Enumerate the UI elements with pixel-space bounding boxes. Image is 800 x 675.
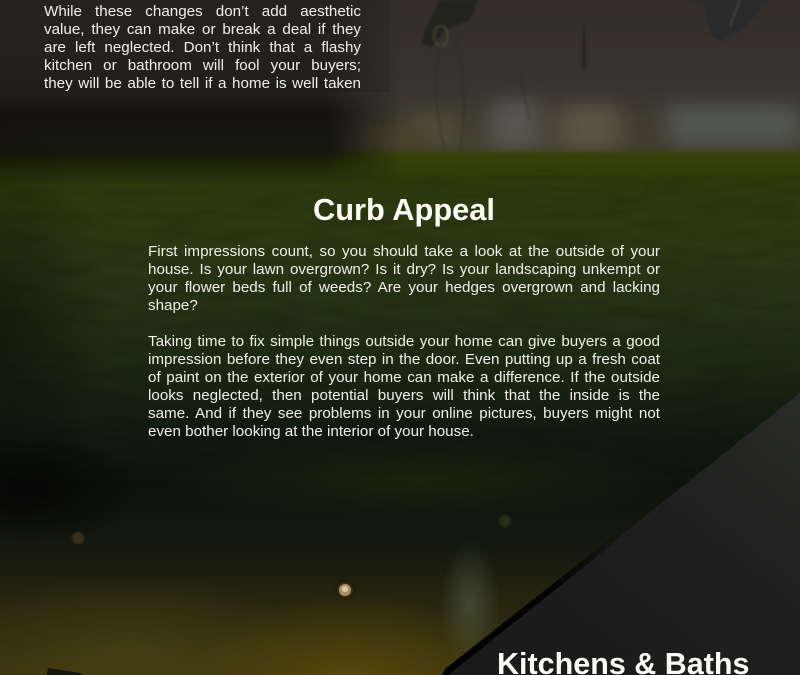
text block: top left paragraph: are left neglected. Don’t think that a flashy xyxy=(44,39,361,56)
text block: top left paragraph xyxy=(44,3,361,92)
heading: Curb Appeal: Curb Appeal xyxy=(313,192,495,227)
text block: curb appeal paragraph one: shape? xyxy=(148,297,198,314)
text block: top left paragraph: While these changes don’t add aesthetic xyxy=(44,3,361,20)
dark plant at bottom left xyxy=(47,668,82,675)
text block: top left paragraph: they will be able to tell if a home is well taken xyxy=(44,75,361,92)
text block: curb appeal paragraph one xyxy=(148,243,660,314)
text block: curb appeal paragraph two: even bother looking at the interior of your house. xyxy=(148,423,474,440)
text block: curb appeal paragraph two: same. And if they see problems in your online pictures, buyers might not xyxy=(148,405,660,422)
lower glow xyxy=(0,440,680,675)
text block: top left paragraph: value, they can make or break a deal if they xyxy=(44,21,361,38)
text block: curb appeal paragraph one: house. Is your lawn overgrown? Is it dry? Is your landscaping unkempt or xyxy=(148,261,660,278)
text block: curb appeal paragraph two: of paint on the exterior of your home can make a difference. If the outside xyxy=(148,369,660,386)
text block: curb appeal paragraph two: Taking time to fix simple things outside your home can give buyers a good xyxy=(148,333,660,350)
icon: garden light large xyxy=(336,581,354,599)
left dark shade xyxy=(0,0,390,92)
text block: curb appeal paragraph two: looks neglected, then potential buyers will think that the inside is the xyxy=(148,387,660,404)
icon: garden light faint right xyxy=(499,515,511,527)
text block: curb appeal paragraph two xyxy=(148,333,660,440)
text block: top left paragraph: kitchen or bathroom will fool your buyers; xyxy=(44,57,361,74)
text block: curb appeal paragraph one: First impressions count, so you should take a look at the outside of your xyxy=(148,243,660,260)
text block: curb appeal paragraph two: impression before they even step in the door. Even putting up a fresh coat xyxy=(148,351,660,368)
icon: hanging plants xyxy=(422,0,768,150)
text block: curb appeal paragraph one: your flower beds full of weeds? Are your hedges overgrown and lacking xyxy=(148,279,660,296)
diagonal panel: kitchens and baths xyxy=(442,393,800,675)
icon: garden light faint left xyxy=(72,532,84,544)
